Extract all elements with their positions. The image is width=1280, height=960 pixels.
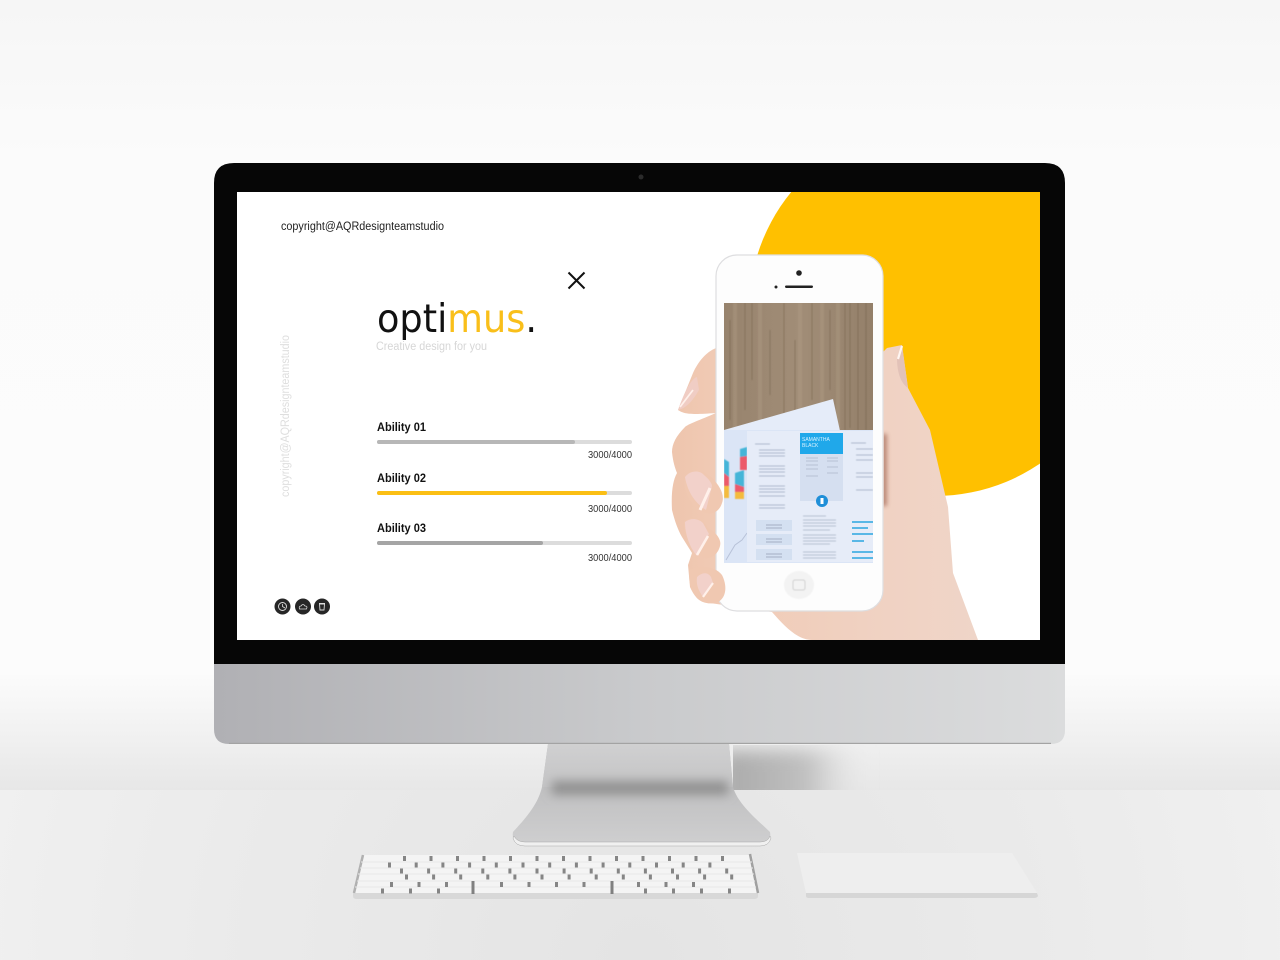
line chart (726, 533, 747, 560)
value: 3000/4000 (588, 503, 632, 515)
phone in hand illustration (672, 255, 978, 640)
thumb nail (897, 345, 908, 388)
ability 01 (377, 422, 632, 458)
resume sheet (747, 431, 873, 562)
title: optimus. (377, 297, 537, 342)
subtitle: Creative design for you (376, 341, 487, 353)
resume sheet: SAMANTHA (802, 437, 830, 443)
progress bar (377, 491, 632, 495)
key row lines (355, 862, 756, 887)
hand (672, 345, 978, 640)
wood photo (724, 303, 873, 438)
screen slide (237, 192, 1040, 640)
keyboard (353, 854, 758, 899)
reference boxes (756, 520, 792, 531)
thumb shadow (881, 434, 887, 506)
monitor chin (214, 660, 1065, 744)
vertical copyright: copyright@AQRdesignteamstudio (280, 335, 292, 497)
finger three (715, 534, 720, 554)
tilted chart sheet (724, 399, 840, 430)
ability 02 (377, 471, 632, 515)
label: Ability 01 (377, 420, 426, 434)
phone (716, 255, 883, 611)
experience text lines (755, 444, 785, 508)
fingers over phone (678, 377, 725, 603)
value: 3000/4000 (588, 449, 632, 461)
profile badge (816, 495, 828, 507)
monitor bezel (214, 163, 1065, 664)
front camera (796, 270, 802, 276)
resume header (800, 433, 843, 454)
lower documents (724, 430, 873, 563)
progress bar (377, 541, 632, 545)
phone body (716, 255, 883, 611)
home button (784, 571, 814, 599)
desk surface (0, 790, 1280, 960)
skill bars (852, 522, 873, 558)
monitor body (214, 163, 1065, 744)
yellow circle (758, 192, 1040, 496)
trackpad (797, 853, 1038, 898)
speaker (785, 286, 813, 288)
sensor (774, 286, 778, 288)
finger two (715, 482, 723, 512)
monitor stand (513, 744, 865, 846)
resume sheet: BLACK (802, 443, 819, 449)
icon: cloud (295, 598, 311, 614)
label: Ability 02 (377, 471, 426, 485)
value: 3000/4000 (588, 552, 632, 564)
keyboard body (353, 855, 758, 898)
bar chart (724, 447, 747, 499)
icon: clock (274, 598, 290, 614)
progress bar (377, 440, 632, 444)
key gaps (381, 858, 735, 891)
icon: trash (314, 598, 330, 614)
phone screen (724, 303, 873, 563)
ability 03 (377, 521, 632, 564)
camera (638, 174, 644, 180)
close icon (568, 272, 584, 288)
finger four (689, 567, 725, 603)
label: Ability 03 (377, 521, 426, 535)
copyright header: copyright@AQRdesignteamstudio (281, 221, 444, 233)
index fingernail (678, 377, 699, 410)
stand neck and foot (513, 744, 770, 845)
stand shadow (733, 745, 844, 790)
